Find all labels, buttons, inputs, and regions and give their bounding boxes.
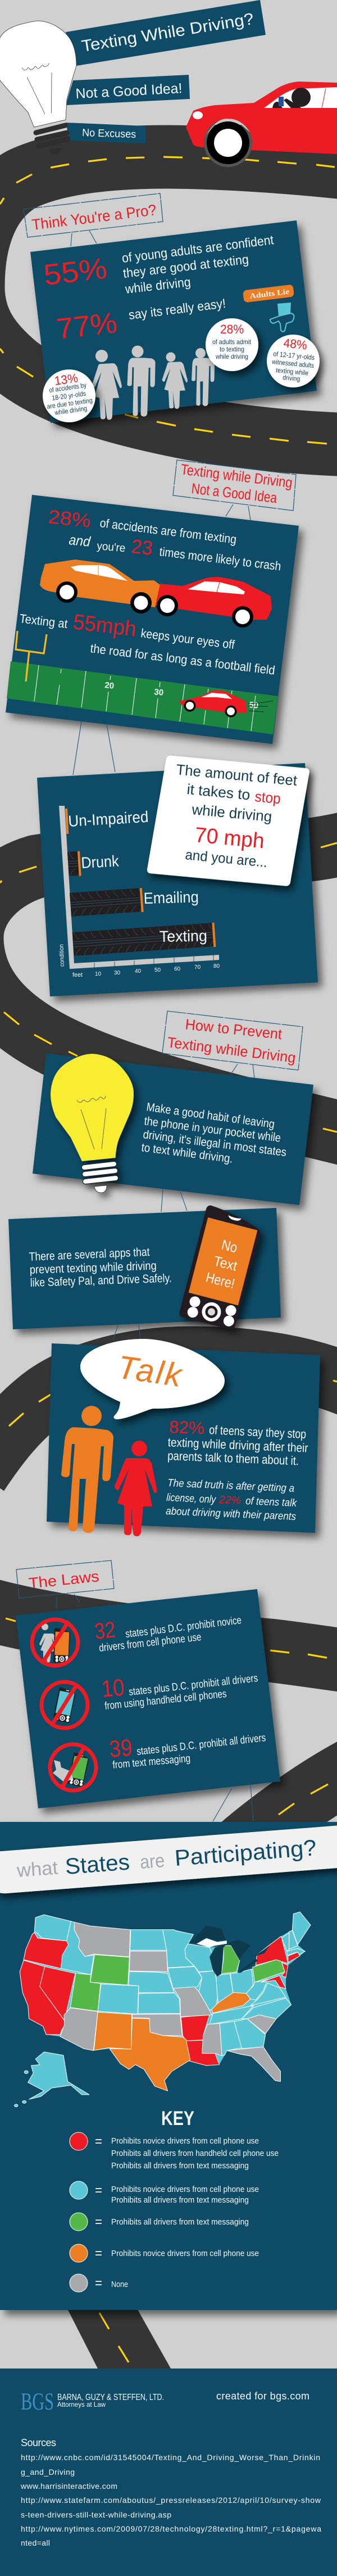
stat: 82% of teens [167, 1417, 308, 1468]
callout: 28% adults [206, 318, 258, 371]
posts between panels [73, 721, 115, 775]
sign: think you're a pro: Think You're a Pro? [31, 201, 157, 233]
panel: states section [0, 1822, 337, 2310]
logo: BGS [21, 2389, 164, 2415]
icon: white light bulb [0, 21, 76, 155]
sources: http://www.statefarm.com/aboutus/_pressreleases/2012/april/10/survey-show [21, 2496, 321, 2505]
icon: football field: 50 [249, 700, 259, 711]
sign: how to prevent texting while driving [162, 1011, 303, 1078]
icon: football field: 30 [154, 687, 164, 698]
text: football field comparison: keeps your eyes off [140, 626, 236, 652]
sign: texting while driving not a good idea: Not a Good Idea [190, 480, 278, 506]
no excuses banner [66, 123, 145, 143]
text: football field comparison: Texting at [19, 611, 69, 631]
legend: key items [70, 2132, 279, 2292]
text: accident and crash stats: 28% [47, 506, 92, 532]
legend item: red: Prohibits all drivers from text messaging [111, 2162, 249, 2171]
sign: how to prevent texting while driving: Texting while Driving [166, 1034, 297, 1066]
text: sad truth: about driving with their parents [166, 1505, 297, 1523]
callout: talk speech bubble [80, 1339, 225, 1419]
text: accident and crash stats [47, 506, 282, 574]
icon: small red car on field [179, 690, 273, 718]
text: sad truth [166, 1477, 298, 1523]
legend item: gray: None [111, 2280, 128, 2289]
text: 32 states: states plus D.C. prohibit novice [125, 1614, 242, 1640]
heading banner: what states are participating: what [16, 1857, 59, 1882]
callout: 48% teens: witnessed adults [271, 358, 315, 369]
text: football field comparison: the road for as long as a football field [89, 641, 276, 678]
credit: created for bgs.com [216, 2390, 309, 2402]
legend item: orange: Prohibits novice drivers from cell phone use [111, 2249, 259, 2258]
legend item: teal: Prohibits all drivers from text messaging [111, 2196, 249, 2205]
callout: 28% adults: 28% [220, 322, 244, 336]
axis labels: 10 [95, 971, 102, 977]
icon: crashed orange car [40, 560, 160, 613]
text: say its easy: say its really easy! [127, 296, 226, 322]
bar: texting: Texting [160, 927, 207, 945]
title banner [66, 0, 266, 66]
sign: think you're a pro [24, 193, 163, 246]
icon: red teen figure [115, 1441, 157, 1536]
icon: people group [91, 345, 217, 421]
legend item: orange [70, 2244, 259, 2262]
text: 10 states: states plus D.C. prohibit all drivers [128, 1672, 258, 1698]
badge: adults lie [243, 285, 294, 303]
subtitle banner: Not a Good Idea! [75, 80, 183, 102]
text: 10 states: from using handheld cell phones [104, 1688, 227, 1712]
text: 39 states: 39 [108, 1734, 134, 1762]
panel: young adult statistics [30, 220, 320, 423]
callout: 13% accidents: of accidents by [48, 381, 87, 394]
axis labels: 30 [114, 970, 121, 976]
axis labels: 80 [213, 963, 220, 969]
heading banner: what states are participating: are [139, 1850, 165, 1873]
text: confident young adults: of young adults are confident [121, 232, 275, 265]
sources: Sources [21, 2437, 56, 2448]
stat: 82% of teens: parents talk to them about it. [167, 1449, 299, 1468]
legend item: red: = [95, 2134, 102, 2149]
stat: 82% of teens: 82% [169, 1417, 205, 1438]
callout: 28% adults: of adults admit [212, 338, 252, 346]
axis labels: 50 [154, 967, 161, 973]
bar: drunk: Drunk [81, 852, 120, 872]
stat: 82% of teens: of teens say they stop [209, 1423, 307, 1441]
legend item: teal [70, 2181, 259, 2205]
text: 39 states: from text messaging [112, 1753, 191, 1771]
icon: football field [7, 631, 278, 734]
text: sad truth: The sad truth is after getting a [167, 1477, 294, 1495]
icon: phone no text here: Text [212, 1253, 239, 1274]
axis labels [58, 944, 220, 978]
text: sad truth: license, only [166, 1492, 217, 1506]
stat: 55%: 55% [42, 252, 109, 292]
callout: 48% teens [267, 335, 320, 387]
icon: no text messaging [50, 1744, 96, 1790]
heading banner: what states are participating: Participating? [174, 1835, 317, 1871]
text: 32 states: drivers from cell phone use [98, 1631, 202, 1654]
text: accident and crash stats: and [68, 532, 92, 550]
axis labels: 70 [194, 964, 201, 971]
legend item: green [70, 2213, 249, 2231]
card: amount of feet to stop: while driving [190, 801, 273, 825]
panel: stopping distance chart [37, 755, 318, 996]
text: accident and crash stats: of accidents are from texting [99, 516, 238, 547]
posts between panels [161, 1189, 187, 1212]
callout: 48% teens: of 12-17 yr-olds [273, 350, 315, 362]
heading: key: KEY [161, 2108, 194, 2130]
icon: crashed red car [156, 577, 272, 628]
card: amount of feet to stop: and you are... [184, 847, 268, 870]
icon: orange parent figure [61, 1406, 113, 1533]
logo: BGS: BARNA, GUZY & STEFFEN, LTD. [57, 2393, 164, 2402]
text: accident and crash stats: times more likely to crash [158, 544, 282, 574]
icon: no handheld phones [42, 1682, 88, 1728]
callout: 13% accidents: while driving [54, 404, 88, 417]
heading banner: what states are participating [0, 1825, 337, 1893]
text: leave phone in pocket [140, 1100, 287, 1166]
bar: texting [72, 923, 216, 957]
posts between panels [113, 1324, 140, 1340]
legend item: red: Prohibits novice drivers from cell phone use [111, 2137, 259, 2146]
legend item: orange: = [95, 2246, 102, 2261]
callout: 13% accidents: 13% [53, 371, 79, 388]
icon: yellow light bulb [51, 1054, 134, 1193]
bar: emailing: Emailing [143, 888, 199, 907]
legend item: gray: = [95, 2276, 102, 2291]
icon: football field: 20 [104, 680, 115, 691]
bar: emailing [70, 888, 199, 917]
text: apps: like Safety Pal, and Drive Safely. [30, 1272, 172, 1289]
text: 32 states: 32 [93, 1617, 117, 1644]
card: amount of feet to stop: 70 mph [194, 823, 266, 853]
stat: 77%: 77% [55, 306, 119, 346]
no excuses banner: No Excuses [82, 127, 136, 141]
text: confident young adults [121, 232, 275, 296]
callout: 28% adults: while driving [215, 353, 248, 360]
callout: 13% accidents: 18-20 yr-olds [51, 390, 86, 402]
legend item: green: Prohibits all drivers from text messaging [111, 2218, 249, 2227]
posts to states section [213, 1785, 253, 1821]
sources: http://www.nytimes.com/2009/07/28/technology/28texting.html?_r=1&pagewa [21, 2524, 321, 2533]
icon: pointing hand [270, 303, 294, 332]
text: leave phone in pocket: driving, it's illegal in most states [142, 1128, 287, 1159]
chart: stopping distance bars [58, 806, 220, 978]
text: apps [29, 1246, 172, 1289]
icon: no novice driver phones [32, 1619, 78, 1666]
axis labels: condition [58, 944, 66, 967]
legend item: red: Prohibits all drivers from handheld cell phone use [111, 2149, 279, 2158]
legend item: gray [70, 2274, 128, 2292]
text: leave phone in pocket: the phone in your pocket while [143, 1115, 281, 1145]
panel: talk to your teens [47, 1339, 320, 1536]
text: sad truth: of teens talk [245, 1495, 298, 1509]
legend item: teal: Prohibits novice drivers from cell phone use [111, 2185, 259, 2194]
text: apps: prevent texting while driving [29, 1260, 157, 1276]
logo: BGS: Attorneys at Law [57, 2401, 106, 2408]
panel: safety apps [8, 1204, 281, 1331]
map: United States by law type [15, 1912, 311, 2107]
card: amount of feet to stop: it takes to [186, 781, 251, 803]
text: apps: There are several apps that [29, 1246, 150, 1264]
legend item: teal: = [95, 2183, 102, 2198]
text: 10 states: 10 [101, 1674, 126, 1702]
title banner: Texting While Driving? [80, 10, 255, 56]
card: amount of feet to stop [147, 755, 310, 886]
text: confident young adults: they are good at texting [122, 252, 249, 281]
text: sad truth: 22% [218, 1494, 242, 1506]
legend item: red [70, 2132, 279, 2171]
callout: talk speech bubble: Talk [115, 1349, 185, 1394]
sources: www.harrisinteractive.com [20, 2482, 117, 2491]
sources: g_and_Driving [21, 2467, 75, 2476]
axis labels: 60 [174, 966, 181, 972]
card: amount of feet to stop: stop [254, 788, 281, 807]
legend item: green: = [95, 2214, 102, 2230]
sources: nted=all [21, 2538, 50, 2547]
sign: texting while driving not a good idea [173, 460, 296, 520]
callout: 48% teens: 48% [283, 336, 308, 352]
text: football field comparison: 55mph [72, 610, 138, 642]
card: amount of feet to stop: The amount of feet [175, 761, 298, 789]
footer [0, 2369, 337, 2576]
icon: red car with texting driver [186, 82, 337, 167]
sources: http://www.cnbc.com/id/31545004/Texting_And_Driving_Worse_Than_Drinkin [21, 2453, 320, 2462]
text: 10 states [101, 1672, 258, 1712]
callout: 13% accidents: are due to texting [46, 396, 93, 410]
text: leave phone in pocket: Make a good habit of leaving [145, 1100, 275, 1131]
bar: drunk [67, 851, 120, 877]
text: confident young adults: while driving [124, 274, 192, 296]
sources: s-teen-drivers-still-text-while-driving.asp [21, 2510, 171, 2519]
callout: 28% adults: to texting [220, 345, 244, 353]
callout: 13% accidents [43, 369, 95, 422]
panel: the laws [16, 1589, 280, 1808]
text: 39 states [108, 1732, 266, 1771]
text: 32 states [93, 1614, 242, 1654]
text: accident and crash stats: you're [97, 540, 126, 554]
callout: 48% teens: driving [283, 373, 300, 383]
heading banner: what states are participating: States [64, 1849, 130, 1879]
sources [20, 2437, 321, 2547]
sign: how to prevent texting while driving: How to Prevent [184, 1016, 283, 1043]
icon: phone no text here: Here! [204, 1270, 236, 1292]
sign: the laws [16, 1560, 114, 1608]
sign: texting while driving not a good idea: Texting while Driving [180, 461, 293, 491]
icon: phone no text here [179, 1204, 265, 1331]
bar: un-impaired: Un-Impaired [68, 808, 149, 830]
callout: 48% teens: texting while [276, 366, 309, 377]
stat: 82% of teens: texting while driving after their [167, 1435, 308, 1455]
badge: adults lie: Adults Lie [249, 287, 290, 300]
subtitle banner [66, 75, 190, 105]
logo: BGS: BGS [21, 2389, 54, 2415]
sign: the laws: The Laws [28, 1568, 100, 1592]
panel: good habit [33, 1053, 313, 1205]
axis labels: 40 [135, 968, 142, 975]
panel: accident statistics [6, 495, 299, 744]
icon: phone no text here: No [220, 1237, 239, 1256]
text: 39 states: states plus D.C. prohibit all drivers [136, 1732, 266, 1758]
text: accident and crash stats: 23 [130, 535, 154, 560]
axis labels: feet [72, 972, 83, 978]
text: leave phone in pocket: to text while driving. [140, 1141, 234, 1166]
text: football field comparison [19, 610, 276, 678]
